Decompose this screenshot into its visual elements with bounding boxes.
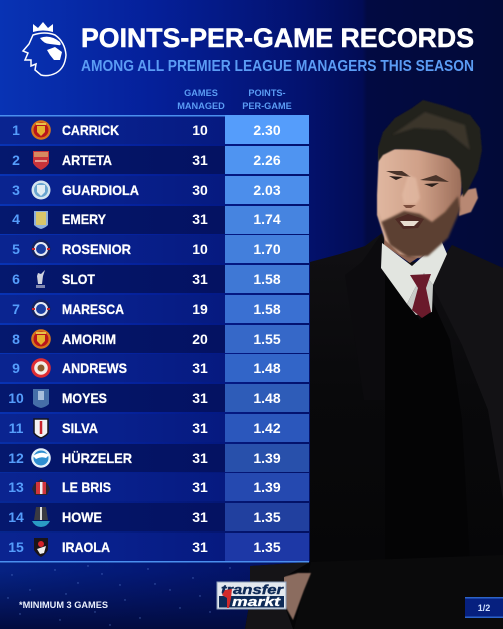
points-per-game values bbox=[253, 122, 281, 555]
hair bbox=[378, 100, 482, 197]
manager names: IRAOLA bbox=[62, 539, 110, 555]
crest: Brentford bbox=[31, 358, 51, 378]
games managed values: 10 bbox=[192, 122, 208, 138]
crest: Aston Villa bbox=[34, 211, 48, 229]
logo: Premier League lion bbox=[23, 22, 66, 76]
beard bbox=[376, 196, 460, 257]
games managed values: 31 bbox=[192, 539, 208, 555]
games managed values: 31 bbox=[192, 152, 208, 168]
column header: points per game: POINTS- bbox=[248, 88, 286, 98]
games managed values bbox=[192, 122, 208, 555]
hair highlights bbox=[392, 112, 470, 150]
page indicator: 1/2 bbox=[478, 603, 490, 613]
photo: manager bbox=[245, 100, 503, 629]
rank numbers: 4 bbox=[12, 211, 20, 227]
rank numbers: 3 bbox=[12, 182, 20, 198]
points-per-game values: 1.35 bbox=[253, 539, 281, 555]
points-per-game values: 1.42 bbox=[253, 420, 281, 436]
table bbox=[0, 115, 309, 562]
crest: Newcastle bbox=[32, 507, 50, 527]
crest: Fulham bbox=[34, 419, 48, 438]
crest: Manchester United bbox=[31, 120, 51, 140]
logo: transfermarkt bbox=[217, 582, 286, 609]
manager names: CARRICK bbox=[62, 122, 119, 138]
trousers bbox=[294, 555, 503, 629]
crest: Brighton bbox=[31, 448, 51, 468]
manager names: ANDREWS bbox=[62, 360, 127, 376]
games managed values: 20 bbox=[192, 331, 208, 347]
logo: transfermarkt: transfer bbox=[221, 582, 284, 597]
points-per-game values: 2.30 bbox=[253, 122, 281, 138]
rank numbers: 1 bbox=[12, 122, 20, 138]
tie bbox=[410, 274, 431, 318]
manager names: ARTETA bbox=[62, 152, 112, 168]
ear bbox=[459, 188, 478, 216]
eyes, brows, nose and mouth bbox=[386, 171, 449, 229]
quilted coat panel bbox=[432, 245, 503, 500]
crest: Arsenal bbox=[33, 151, 49, 170]
coat bbox=[245, 233, 503, 629]
rank numbers: 2 bbox=[12, 152, 20, 168]
rank numbers: 15 bbox=[8, 539, 24, 555]
games managed values: 31 bbox=[192, 360, 208, 376]
points-per-game values: 1.39 bbox=[253, 479, 281, 495]
manager names: SLOT bbox=[62, 271, 95, 287]
column header: games managed: MANAGED bbox=[177, 101, 225, 111]
games managed values: 31 bbox=[192, 390, 208, 406]
club crests bbox=[31, 120, 51, 557]
games managed values: 19 bbox=[192, 301, 208, 317]
rank numbers: 14 bbox=[8, 509, 24, 525]
rank numbers bbox=[8, 122, 24, 555]
points-per-game values: 1.55 bbox=[253, 331, 281, 347]
manager names: MOYES bbox=[62, 390, 107, 406]
points-per-game values: 1.39 bbox=[253, 450, 281, 466]
points-per-game values: 1.48 bbox=[253, 390, 281, 406]
points-per-game values: 1.74 bbox=[253, 211, 281, 227]
manager names: HÜRZELER bbox=[62, 450, 132, 466]
points-per-game values: 1.58 bbox=[253, 301, 281, 317]
manager names: SILVA bbox=[62, 420, 98, 436]
rank numbers: 5 bbox=[12, 241, 20, 257]
games managed values: 10 bbox=[192, 241, 208, 257]
crest: Chelsea bbox=[32, 240, 50, 258]
crest: Bournemouth bbox=[34, 538, 48, 557]
hand bbox=[283, 573, 311, 620]
rank numbers: 13 bbox=[8, 479, 24, 495]
points-per-game cells bbox=[225, 115, 309, 561]
coat lapel bbox=[345, 233, 385, 400]
games managed values: 31 bbox=[192, 211, 208, 227]
manager names: EMERY bbox=[62, 211, 107, 227]
neck bbox=[384, 205, 448, 263]
rank numbers: 8 bbox=[12, 331, 20, 347]
rank numbers: 11 bbox=[9, 420, 24, 436]
games managed values: 31 bbox=[192, 420, 208, 436]
crest: Manchester City bbox=[32, 180, 50, 200]
icon: red player bbox=[222, 589, 232, 608]
footnote: *MINIMUM 3 GAMES bbox=[19, 600, 108, 610]
column header: games managed: GAMES bbox=[184, 88, 218, 98]
logo: transfermarkt: markt bbox=[232, 594, 281, 609]
column header: points per game: PER-GAME bbox=[242, 101, 292, 111]
crest: Manchester United bbox=[31, 329, 51, 349]
shirt collar bbox=[381, 240, 447, 304]
face bbox=[377, 148, 463, 258]
page indicator bbox=[465, 597, 503, 618]
games managed values: 31 bbox=[192, 509, 208, 525]
rank numbers: 9 bbox=[12, 360, 20, 376]
games managed values: 31 bbox=[192, 450, 208, 466]
points-per-game values: 1.70 bbox=[253, 241, 281, 257]
rank numbers: 7 bbox=[12, 301, 20, 317]
points-per-game values: 1.48 bbox=[253, 360, 281, 376]
points-per-game values: 2.26 bbox=[253, 152, 281, 168]
points-per-game values: 1.35 bbox=[253, 509, 281, 525]
column header: games managed bbox=[177, 88, 225, 111]
points-per-game values: 1.58 bbox=[253, 271, 281, 287]
column header: points per game bbox=[242, 88, 292, 111]
rank numbers: 10 bbox=[8, 390, 24, 406]
manager names: HOWE bbox=[62, 509, 102, 525]
manager names: ROSENIOR bbox=[62, 241, 131, 257]
row backgrounds bbox=[0, 115, 309, 562]
games managed values: 31 bbox=[192, 271, 208, 287]
vest bbox=[382, 270, 470, 565]
title: POINTS-PER-GAME RECORDS bbox=[81, 23, 474, 53]
sleeve lower bbox=[245, 562, 310, 629]
games managed values: 31 bbox=[192, 479, 208, 495]
crest: Liverpool bbox=[36, 270, 45, 288]
crest: Sunderland bbox=[32, 479, 50, 495]
rank numbers: 6 bbox=[12, 271, 20, 287]
crest: Everton bbox=[33, 389, 49, 408]
manager names: LE BRIS bbox=[62, 479, 111, 495]
manager names: AMORIM bbox=[62, 331, 116, 347]
manager names: MARESCA bbox=[62, 301, 124, 317]
games managed values: 30 bbox=[192, 182, 208, 198]
rank numbers: 12 bbox=[8, 450, 24, 466]
shirt front bbox=[407, 273, 433, 315]
points-per-game values: 2.03 bbox=[253, 182, 281, 198]
manager names: GUARDIOLA bbox=[62, 182, 139, 198]
crest: Chelsea bbox=[32, 300, 50, 318]
manager names bbox=[62, 122, 139, 555]
